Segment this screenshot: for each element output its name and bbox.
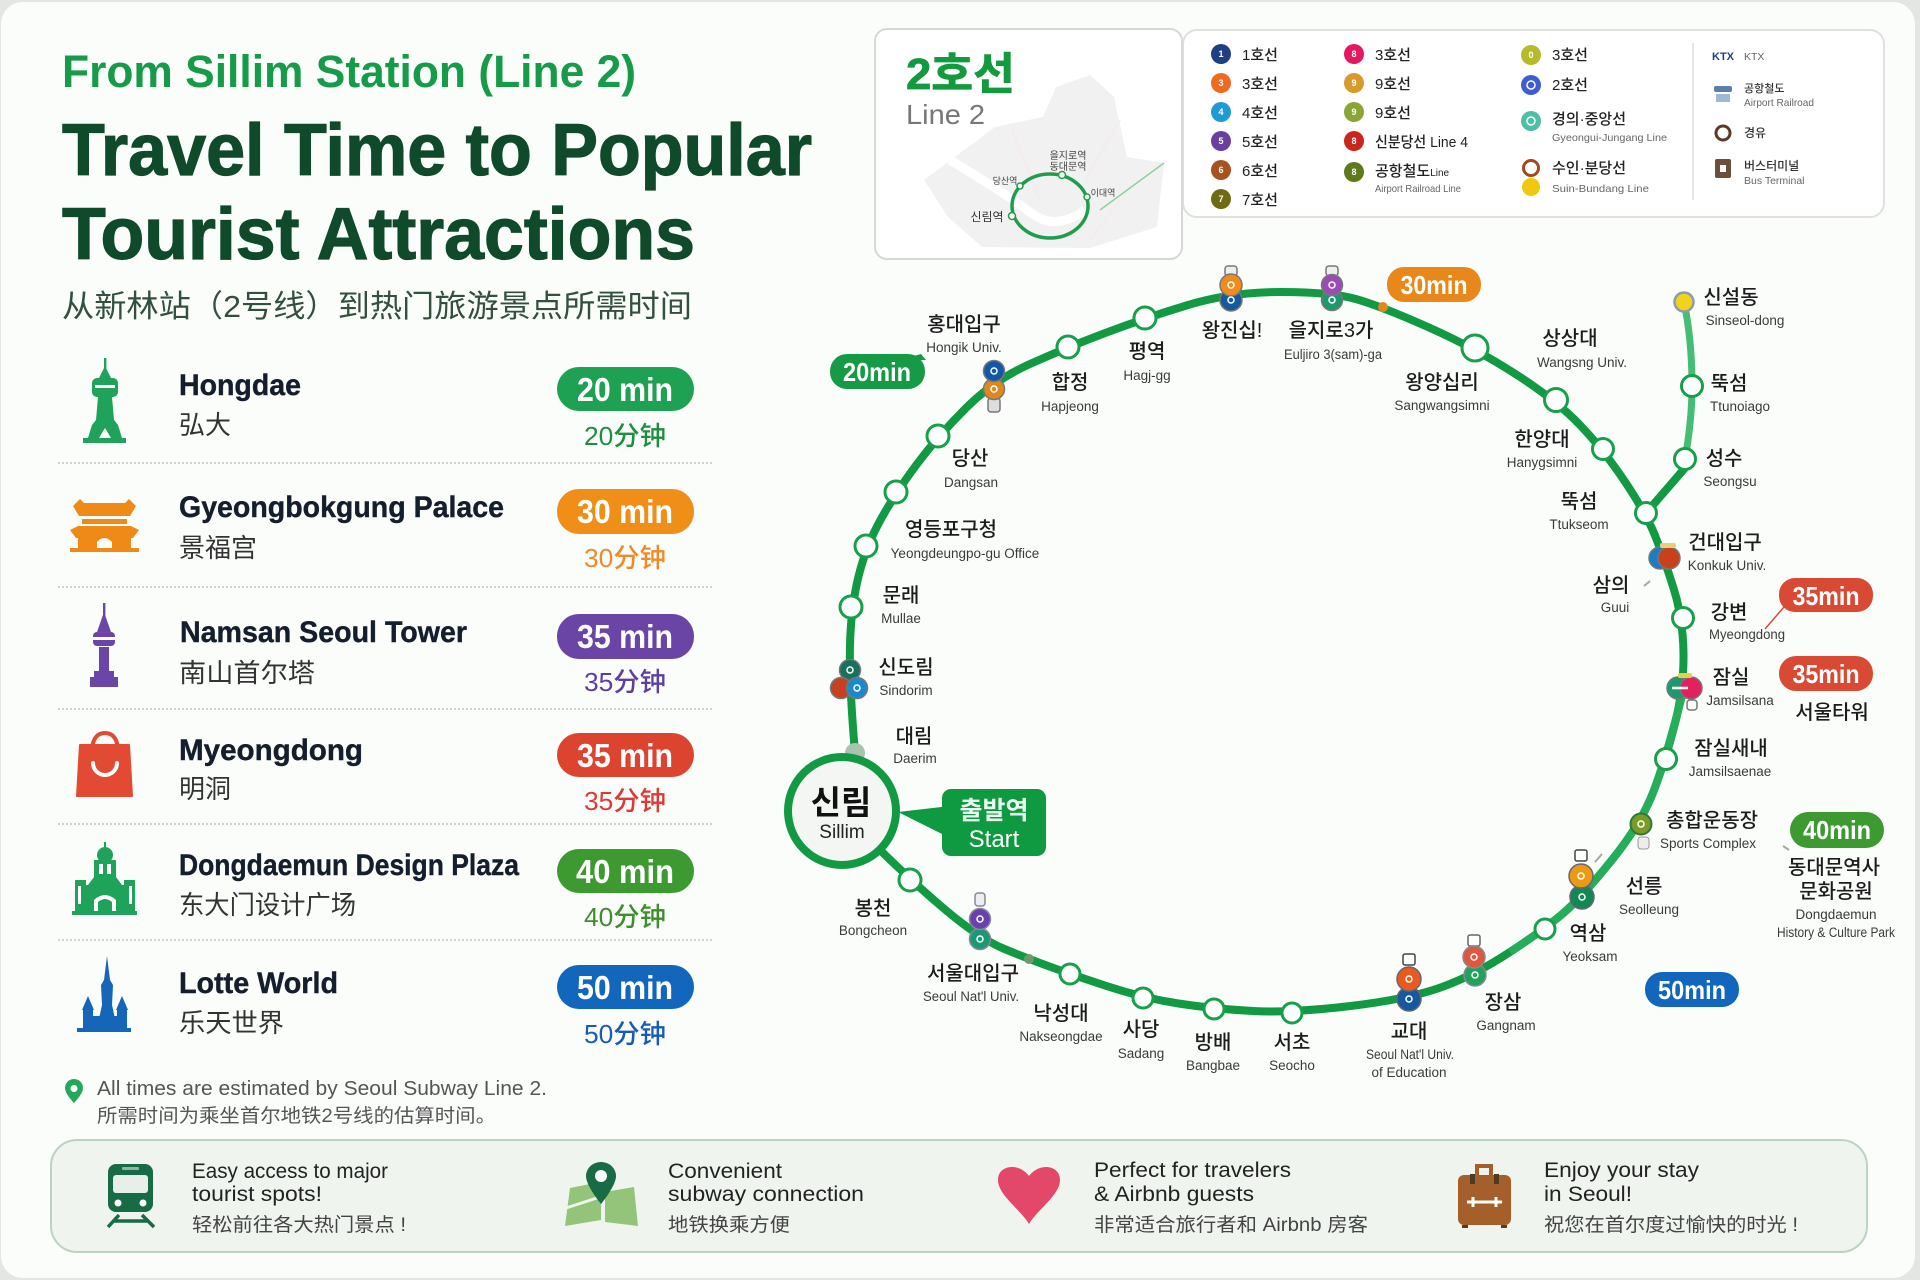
legend column 1: 7 (1218, 194, 1224, 204)
interchange: Gangnam (1463, 935, 1486, 986)
interchange: Sinseol-dong (1674, 292, 1694, 312)
label: Euljiro 3-ga: 을지로3가 (1289, 319, 1373, 342)
icon: location pin (65, 1079, 83, 1103)
bottom panel (51, 1140, 1867, 1252)
label: Mullae: Mullae (881, 611, 921, 626)
benefit: easy access (108, 1160, 406, 1236)
time badge: 40min (1790, 812, 1884, 848)
legend column 4: Bus Terminal (1744, 175, 1804, 187)
label: Seoul Tower: 서울타워 (1795, 701, 1869, 724)
row: Gyeongbokgung Palace: 景福宫 (179, 533, 257, 563)
label: Gangnam (1476, 991, 1536, 1033)
row: Gyeongbokgung Palace: 30 min (577, 493, 673, 530)
legend column 2: 9 (1351, 107, 1357, 117)
interchange: Gyodae (1397, 954, 1421, 1011)
label: Myeongdong station (1709, 601, 1785, 642)
label: Seocho (1269, 1031, 1315, 1073)
icon: red shopping bag (77, 733, 132, 796)
row: Hongdae: Hongdae (179, 369, 301, 402)
interchange: Hongik Univ. (984, 360, 1004, 412)
legend column 1: 4 (1218, 107, 1224, 117)
label: Guui: 삼의 (1593, 574, 1629, 597)
label: Hagj-gg: 평역 (1129, 340, 1165, 363)
legend column 3: 2호선 (1552, 77, 1588, 94)
Line 2 mini map box: 동대문역 (1050, 161, 1086, 173)
row: Namsan Seoul Tower: 35 min (577, 618, 673, 655)
mini map: Line 2 ring (1012, 174, 1088, 238)
row: Lotte World: 乐天世界 (179, 1008, 284, 1038)
legend column 1: 1 (1218, 49, 1224, 59)
Start callout (898, 789, 1046, 856)
row: Gyeongbokgung Palace: 30分钟 (584, 543, 666, 573)
label: Yeoksam (1562, 922, 1618, 964)
Seongsu branch (1646, 302, 1692, 513)
legend column 3: 3호선 (1552, 47, 1588, 64)
label: Guui: Guui (1601, 600, 1629, 615)
icon: green building (72, 842, 137, 915)
row: Lotte World: 50 min (577, 969, 673, 1006)
row: Dongdaemun Design Plaza: 东大门设计广场 (179, 890, 356, 920)
legend column 1: 5 (1218, 136, 1224, 146)
legend column 1: 4호선 (1242, 105, 1278, 122)
label: Mullae: 문래 (883, 584, 919, 607)
row: Lotte World: Lotte World (179, 967, 338, 1000)
label: Euljiro 3-ga (1284, 319, 1382, 362)
legend column 1 (1211, 44, 1278, 209)
label: Bangbae (1186, 1031, 1240, 1073)
label: Ttukseom: 뚝섬 (1561, 490, 1597, 513)
label: Ttukseom: Ttukseom (1549, 517, 1609, 532)
time badge: 20min (830, 354, 926, 389)
label: Seoul Nat'l Univ.: Seoul Nat'l Univ. (923, 989, 1019, 1004)
row: Myeongdong: 35 min (577, 737, 673, 774)
Line 2 mini map box: 당산역 (993, 176, 1017, 186)
Line 2 mini map box: 을지로역 (1050, 150, 1086, 162)
legend column 3: Suin-Bundang Line (1552, 183, 1649, 195)
benefit: enjoy your stay: Enjoy your stay (1544, 1159, 1700, 1182)
benefit: perfect for travelers: Perfect for travelers (1094, 1159, 1291, 1182)
label: Ttukseom branch: Ttunoiago (1710, 399, 1770, 414)
row: Myeongdong: 35分钟 (584, 786, 666, 816)
interchange: Euljiro 3-ga (1322, 266, 1342, 310)
interchange: Sindorim (830, 660, 868, 698)
lighter ring segments (1510, 688, 1684, 952)
interchange: Wangsimni (1220, 266, 1242, 311)
label: Nakseongdae: Nakseongdae (1019, 1029, 1103, 1044)
row: Dongdaemun Design Plaza (72, 842, 694, 932)
label: Jamsil: 잠실 (1713, 666, 1749, 689)
row: Namsan Seoul Tower: 南山首尔塔 (179, 658, 315, 688)
label: Seoul Nat'l Univ. of Education: of Education (1371, 1065, 1447, 1080)
label: Sinseol-dong: 신설동 (1703, 286, 1759, 309)
label: Mullae (881, 584, 921, 626)
label: Myeongdong station: Myeongdong (1709, 627, 1785, 642)
row: Myeongdong: Myeongdong (179, 734, 363, 767)
legend column 2 (1344, 44, 1468, 195)
time badge: 50min (1645, 972, 1739, 1007)
label: Gangnam: 장삼 (1485, 991, 1521, 1014)
time badge: 35min Myeongdong (1765, 578, 1873, 629)
label: Daerim (893, 725, 937, 766)
row: Hongdae: 20分钟 (584, 421, 666, 451)
footnote: 所需时间为乘坐首尔地铁2号线的估算时间。 (97, 1105, 496, 1127)
legend column 2: 신분당선 Line 4 (1375, 134, 1468, 151)
label: Hanyang Univ.: 한양대 (1514, 428, 1570, 451)
label: Jamsilsaenae: 잠실새내 (1694, 737, 1768, 760)
Start callout: Start (969, 826, 1020, 853)
row: Namsan Seoul Tower: 35分钟 (584, 667, 666, 697)
label: Seocho: Seocho (1269, 1058, 1315, 1073)
label: Bangbae: Bangbae (1186, 1058, 1240, 1073)
Chinese subtitle: 从新林站（2号线）到热门旅游景点所需时间 (62, 289, 692, 324)
legend column 3: 0 (1528, 50, 1534, 60)
label: Sindorim (878, 656, 934, 698)
benefit: easy access: Easy access to major (192, 1160, 388, 1183)
label: Seongsu: 성수 (1706, 447, 1742, 470)
Sillim station circle: 신림 (811, 784, 871, 821)
icon: train (108, 1164, 154, 1227)
label: Wangsing Univ.: 상상대 (1542, 327, 1598, 350)
label: Yeoksam: 역삼 (1570, 922, 1606, 945)
subway map (788, 266, 1895, 1080)
legend column 2: 공항철도Line (1375, 163, 1450, 180)
legend column 1: 3호선 (1242, 76, 1278, 93)
label: Gangnam: Gangnam (1476, 1018, 1536, 1033)
label: Hapjeong: 합정 (1052, 371, 1088, 394)
legend column 2: 8 (1351, 136, 1357, 146)
label: Myeongdong station: 강변 (1711, 601, 1747, 624)
label: Sinseol-dong (1703, 286, 1784, 328)
label: Bangbae: 방배 (1195, 1031, 1231, 1054)
label: Seoul Nat'l Univ. of Education (1366, 1020, 1454, 1080)
benefit: enjoy your stay: 祝您在首尔度过愉快的时光 ! (1544, 1214, 1798, 1236)
label: Hongik Univ.: Hongik Univ. (926, 340, 1002, 355)
row: Dongdaemun Design Plaza: 40分钟 (584, 902, 666, 932)
row: Hongdae (83, 358, 694, 451)
label: Sangwangsimni: 왕양십리 (1405, 371, 1479, 394)
label: Sangwangsimni: Sangwangsimni (1394, 398, 1490, 413)
label: Guui (1593, 574, 1629, 615)
label: Konkuk Univ.: Konkuk Univ. (1688, 558, 1766, 573)
legend column 4 (1712, 51, 1814, 187)
Line 2 mini map box (875, 29, 1182, 259)
legend column 3: 수인·분당선 (1552, 160, 1626, 177)
label: Hagj-gg (1123, 340, 1171, 383)
time badge: 30min: 30min (1400, 270, 1468, 300)
label: Seolleung: Seolleung (1619, 902, 1679, 917)
label: Seoul Nat'l Univ. of Education: Seoul Nat'l Univ. (1366, 1047, 1454, 1062)
attraction list (58, 358, 714, 1049)
heading: 2호선: 2호선 (906, 50, 1015, 99)
time badge: 30min (1387, 267, 1481, 302)
row: Myeongdong: 明洞 (179, 774, 231, 804)
label: Sinseol-dong: Sinseol-dong (1706, 313, 1784, 328)
legend column 3: 경의·중앙선 (1552, 111, 1626, 128)
label: Dongdaemun History & Culture Park: Dongdaemun (1795, 907, 1877, 922)
label: Seolleung: 선릉 (1626, 875, 1662, 898)
benefit: convenient subway: subway connection (668, 1183, 864, 1206)
benefit: easy access: 轻松前往各大热门景点 ! (192, 1214, 406, 1236)
row: Namsan Seoul Tower: Namsan Seoul Tower (180, 616, 467, 649)
label: Hapjeong: Hapjeong (1041, 399, 1099, 414)
benefit: convenient subway (565, 1160, 864, 1236)
time badge: 35min Seoul Tower: 35min (1792, 659, 1860, 689)
icon: orange palace (70, 499, 139, 552)
label: Hapjeong (1041, 371, 1099, 414)
benefit: enjoy your stay: in Seoul! (1544, 1183, 1632, 1206)
legend column 1: 6호선 (1242, 163, 1278, 180)
label: Seoul Nat'l Univ. of Education: 교대 (1391, 1020, 1427, 1043)
benefit: enjoy your stay (1458, 1159, 1798, 1236)
icon: green tower (83, 358, 126, 443)
footnote: All times are estimated by Seoul Subway Line 2. (97, 1078, 547, 1100)
label: Jamsil: Jamsilsana (1706, 693, 1774, 708)
row: Dongdaemun Design Plaza: 40 min (576, 853, 674, 890)
time badge: 50min: 50min (1658, 975, 1726, 1005)
label: Seolleung (1619, 875, 1679, 917)
icon: airport railroad (1714, 86, 1732, 102)
icon: blue castle (77, 956, 131, 1032)
main title: Tourist Attractions (62, 194, 695, 275)
row: Lotte World (77, 956, 694, 1049)
label: Yeongdeungpo-gu Office: 영등포구청 (905, 518, 997, 541)
benefit: convenient subway: 地铁换乘方便 (668, 1214, 790, 1236)
legend column 1: 1호선 (1242, 47, 1278, 64)
label: Jamsilsaenae (1689, 737, 1771, 779)
plain stations (840, 307, 1702, 1023)
label: Daerim: Daerim (893, 751, 937, 766)
label: Yeongdeungpo-gu Office: Yeongdeungpo-gu Office (891, 546, 1039, 561)
station labels (839, 286, 1895, 1080)
Line 2 mini map box: 신림역 (970, 210, 1004, 224)
label: Sindorim: Sindorim (879, 683, 933, 698)
label: Nakseongdae (1019, 1002, 1103, 1044)
legend column 2: Airport Railroad Line (1375, 183, 1461, 195)
icon: suitcase (1458, 1166, 1511, 1228)
row: Myeongdong (77, 733, 694, 816)
row: Dongdaemun Design Plaza: Dongdaemun Design Plaza (179, 849, 519, 882)
Sillim station circle: Sillim (819, 822, 865, 843)
label: Wangsing Univ. (1537, 327, 1627, 370)
label: Euljiro 3-ga: Euljiro 3(sam)-ga (1284, 347, 1382, 362)
label: Dongdaemun History & Culture Park (1777, 856, 1895, 940)
interchange: Seoul National Univ. (970, 893, 990, 950)
header (62, 46, 812, 324)
interchange: Seolleung (1569, 850, 1594, 909)
icon: purple tower (90, 603, 118, 687)
label: Wangsing Univ.: Wangsng Univ. (1537, 355, 1627, 370)
icon: heart (998, 1167, 1060, 1224)
legend column 2: 9호선 (1375, 76, 1411, 93)
row: Gyeongbokgung Palace: Gyeongbokgung Palace (179, 491, 504, 524)
legend column 4: 경유 (1744, 126, 1766, 140)
time badge: 35min Seoul Tower (1779, 656, 1873, 691)
label: Sports Complex (1660, 809, 1758, 851)
label: Dongdaemun History & Culture Park: History & Culture Park (1777, 925, 1895, 940)
legend column 1: 5호선 (1242, 134, 1278, 151)
main title (62, 110, 812, 275)
label: Hongik Univ.: 홍대입구 (927, 313, 1001, 336)
legend column 2: 8 (1351, 167, 1357, 177)
Line 2 ring (850, 292, 1684, 1011)
label: Sangwangsimni (1394, 371, 1490, 413)
legend outer frame (1183, 30, 1884, 217)
label: Seongsu (1703, 447, 1757, 489)
row: Hongdae: 弘大 (179, 410, 231, 440)
label: Dongdaemun History & Culture Park: 동대문역사 (1788, 856, 1880, 879)
benefit: perfect for travelers: & Airbnb guests (1094, 1183, 1254, 1206)
icon: bus terminal (1715, 159, 1731, 178)
legend column 3: Gyeongui-Jungang Line (1552, 132, 1667, 144)
footnote (65, 1078, 547, 1127)
interchange: Sports Complex (1630, 814, 1652, 849)
label: Yeongdeungpo-gu Office (891, 518, 1039, 561)
label: Nakseongdae: 낙성대 (1033, 1002, 1089, 1025)
label: Seocho: 서초 (1274, 1031, 1310, 1054)
label: Hongik Univ. (926, 313, 1002, 355)
Start callout: 출발역 (959, 797, 1029, 825)
label: Sports Complex: 총합운동장 (1666, 809, 1758, 832)
legend column 1: 6 (1218, 165, 1224, 175)
legend column 4: KTX (1744, 51, 1764, 63)
icon: map with pin (565, 1162, 638, 1226)
label: Sports Complex: Sports Complex (1660, 836, 1756, 851)
benefit: easy access: tourist spots! (192, 1183, 322, 1206)
legend column 4: 버스터미널 (1744, 159, 1799, 173)
label: Seongsu: Seongsu (1703, 474, 1757, 489)
label: Sadang: 사당 (1123, 1018, 1159, 1041)
mini map: Seoul silhouette (924, 75, 1164, 248)
label: Dangsan (944, 447, 998, 490)
interchange: Konkuk Univ. (1649, 543, 1680, 569)
legend column 2: 8 (1351, 49, 1357, 59)
legend column 4: Airport Railroad (1744, 97, 1814, 109)
label: Wangjin: 왕진십! (1202, 319, 1262, 342)
label: Bongcheon: 봉천 (855, 897, 891, 920)
label: Sadang (1118, 1018, 1164, 1061)
label: Hanyang Univ. (1507, 428, 1577, 470)
legend column 1: 7호선 (1242, 192, 1278, 209)
subtitle: from Sillim Station: From Sillim Station (Line 2) (62, 46, 636, 97)
legend column 4: 공항철도 (1744, 82, 1784, 95)
label: Sadang: Sadang (1118, 1046, 1164, 1061)
legend column 1: 3 (1218, 78, 1224, 88)
legend column 3 (1521, 45, 1667, 196)
label: Ttukseom branch (1710, 372, 1770, 414)
row: Lotte World: 50分钟 (584, 1019, 666, 1049)
label: Dongdaemun History & Culture Park: 문화공원 (1799, 880, 1873, 903)
label: Hanyang Univ.: Hanygsimni (1507, 455, 1577, 470)
legend column 4: KTX (1712, 51, 1735, 63)
label: Seoul Nat'l Univ.: 서울대입구 (927, 962, 1019, 985)
row: Hongdae: 20 min (577, 371, 673, 408)
legend column 2: 9 (1351, 78, 1357, 88)
interchange: Jamsil (1667, 673, 1702, 710)
Line 2 mini map box: Line 2 (906, 99, 985, 130)
label: Ttukseom (1549, 490, 1609, 532)
label: Seoul Nat'l Univ. (923, 962, 1019, 1004)
main title: Travel Time to Popular (62, 110, 812, 191)
time badge: 40min: 40min (1803, 815, 1871, 845)
benefit: convenient subway: Convenient (668, 1160, 782, 1183)
label: Yeoksam: Yeoksam (1562, 949, 1618, 964)
Sillim station circle (788, 757, 896, 865)
Line 2 mini map box: 이대역 (1091, 188, 1115, 198)
label: Bongcheon: Bongcheon (839, 923, 907, 938)
label: Ttukseom branch: 뚝섬 (1711, 372, 1747, 395)
time badge: 20min: 20min (843, 357, 911, 387)
label: Dangsan: Dangsan (944, 475, 998, 490)
label: Sindorim: 신도림 (878, 656, 934, 679)
benefit: perfect for travelers: 非常适合旅行者和 Airbnb 房客 (1094, 1214, 1368, 1236)
row: Gyeongbokgung Palace (70, 489, 694, 573)
label: Konkuk Univ. (1688, 531, 1766, 573)
legend panel (875, 29, 1884, 259)
label: Daerim: 대림 (896, 725, 932, 748)
label: Konkuk Univ.: 건대입구 (1688, 531, 1762, 554)
row: Namsan Seoul Tower (90, 603, 694, 697)
legend column 2: 9호선 (1375, 105, 1411, 122)
label: Jamsil (1706, 666, 1774, 708)
label: Bongcheon (839, 897, 907, 938)
label: Jamsilsaenae: Jamsilsaenae (1689, 764, 1771, 779)
label: Dangsan: 당산 (952, 447, 988, 470)
legend column 2: 3호선 (1375, 47, 1411, 64)
label: Hagj-gg: Hagj-gg (1123, 368, 1171, 383)
time badge: 35min Myeongdong: 35min (1792, 581, 1860, 611)
benefit: perfect for travelers (998, 1159, 1368, 1236)
